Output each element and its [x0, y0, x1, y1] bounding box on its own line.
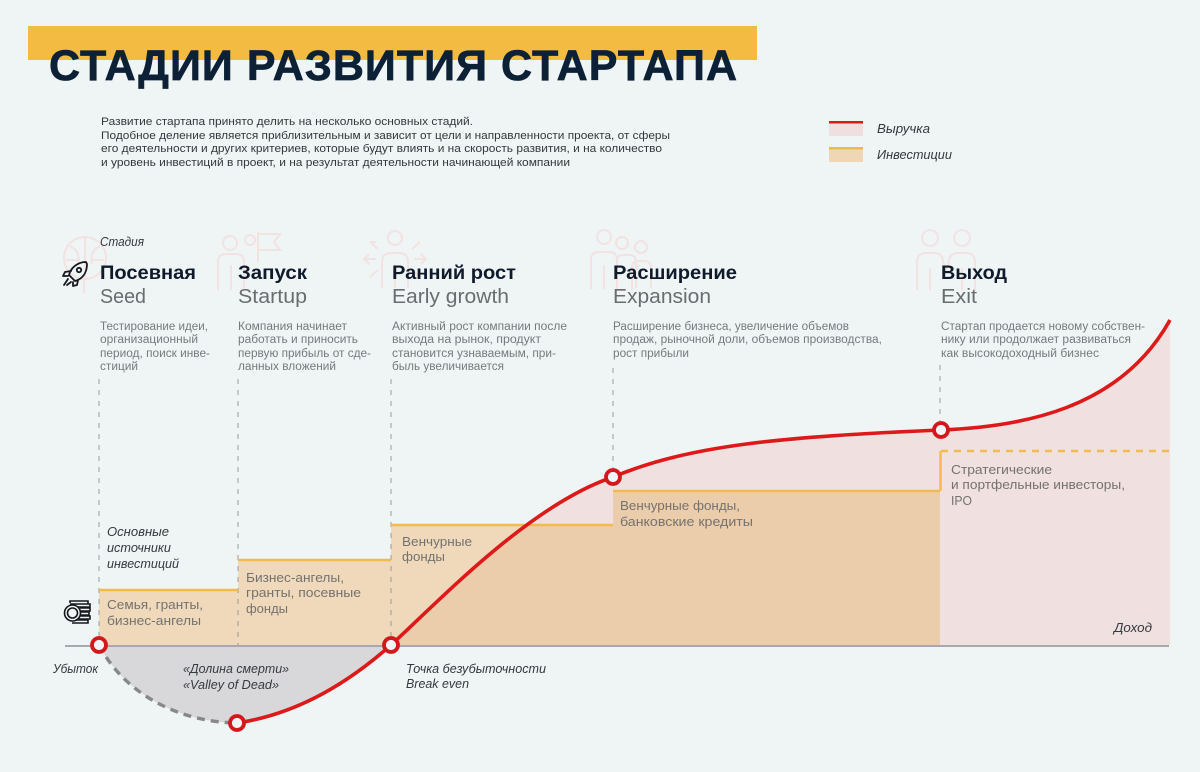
- column: seed: [100, 263, 210, 373]
- exit description: нику или продолжает развиваться: [941, 334, 1131, 346]
- faded icon: expansion team: [591, 230, 651, 290]
- sources: exit: Стратегические: [951, 462, 1052, 477]
- dashed loss curve: [99, 645, 237, 723]
- investment sources label: Основные: [107, 525, 169, 539]
- investment sources label: инвестиций: [107, 557, 179, 571]
- sources: exit: [951, 462, 1125, 508]
- intro text: и уровень инвестиций в проект, и на результат деятельности начинающей компании: [101, 157, 570, 169]
- early growth description: выхода на рынок, продукт: [392, 334, 542, 346]
- startup description: работать и приносить: [238, 334, 358, 346]
- legend: investment swatch: [829, 147, 863, 162]
- seed description: период, поиск инве-: [100, 348, 210, 360]
- exit subheading: Exit: [941, 286, 977, 308]
- sources: expansion: [620, 498, 753, 529]
- sources: early growth: фонды: [402, 549, 445, 564]
- sources: early growth: [402, 534, 472, 564]
- intro text: Развитие стартапа принято делить на несколько основных стадий.: [101, 116, 473, 128]
- seed description: организационный: [100, 334, 198, 346]
- stage guide lines: [99, 365, 940, 645]
- sources: seed: Семья, гранты,: [107, 597, 203, 612]
- faded icon: exit handshake: [917, 230, 975, 290]
- legend: [829, 121, 952, 162]
- label: income: Доход: [1112, 621, 1152, 635]
- investment sources label: [107, 525, 179, 571]
- exit heading: Выход: [941, 263, 1007, 284]
- column: startup: [238, 263, 371, 373]
- sources: exit: IPO: [951, 493, 972, 508]
- sources: startup: гранты, посевные: [246, 585, 361, 600]
- startup subheading: Startup: [238, 286, 307, 308]
- column: early growth: [392, 263, 567, 373]
- area: revenue: [391, 320, 1170, 645]
- column: exit: [941, 263, 1145, 360]
- faded icon: seed idea: [64, 237, 106, 293]
- sources: seed: бизнес-ангелы: [107, 613, 201, 628]
- seed description: [100, 321, 210, 373]
- early growth description: Активный рост компании после: [392, 321, 567, 333]
- label: stage: Стадия: [100, 235, 144, 249]
- label: break even: [406, 662, 546, 691]
- sources: startup: фонды: [246, 601, 288, 616]
- sources: startup: Бизнес-ангелы,: [246, 570, 344, 585]
- intro text: [101, 116, 670, 169]
- axis: [65, 645, 1169, 647]
- expansion subheading: Expansion: [613, 286, 711, 308]
- seed heading: Посевная: [100, 263, 196, 284]
- startup description: Компания начинает: [238, 321, 348, 333]
- legend: investment label: Инвестиции: [877, 148, 952, 162]
- startup description: [238, 321, 371, 373]
- exit description: Стартап продается новому собствен-: [941, 321, 1145, 333]
- column: expansion: [613, 263, 882, 360]
- intro text: его деятельности и других критериев, которые будут влиять и на скорость развития, и на количество: [101, 143, 662, 155]
- label: valley of death: «Valley of Dead»: [183, 678, 279, 692]
- revenue curve: [237, 320, 1170, 723]
- expansion description: продаж, рыночной доли, объемов производства,: [613, 334, 882, 346]
- icon: rocket: [63, 262, 87, 286]
- label: loss: Убыток: [52, 662, 99, 676]
- seed subheading: Seed: [100, 286, 146, 308]
- seed description: стиций: [100, 361, 138, 373]
- sources: seed: [107, 597, 203, 628]
- title: СТАДИИ РАЗВИТИЯ СТАРТАПА: [49, 42, 737, 90]
- legend: revenue label: Выручка: [877, 122, 930, 136]
- investment sources label: источники: [107, 541, 171, 555]
- startup heading: Запуск: [238, 263, 308, 284]
- legend: revenue swatch: [829, 121, 863, 136]
- area: revenue and investment overlap: [398, 492, 940, 645]
- area: investment steps: [99, 491, 940, 645]
- faded icon: early growth person with arrows: [364, 231, 426, 288]
- early growth description: становится узнаваемым, при-: [392, 348, 556, 360]
- startup description: ланных вложений: [238, 361, 336, 373]
- expansion description: Расширение бизнеса, увеличение объемов: [613, 321, 849, 333]
- early growth description: [392, 321, 567, 373]
- exit description: [941, 321, 1145, 360]
- sources: expansion: банковские кредиты: [620, 514, 753, 529]
- label: break even: Break even: [406, 677, 469, 691]
- sources: exit: и портфельные инвесторы,: [951, 477, 1125, 492]
- exit description: как высокодоходный бизнес: [941, 348, 1099, 360]
- expansion description: рост прибыли: [613, 348, 689, 360]
- intro text: Подобное деление является приблизительным и зависит от цели и направленности проекта, от сферы: [101, 130, 670, 142]
- expansion description: [613, 321, 882, 360]
- startup description: первую прибыль от сде-: [238, 348, 371, 360]
- early growth heading: Ранний рост: [392, 263, 516, 284]
- chart: investment and revenue curve: [65, 320, 1170, 730]
- title banner: [28, 26, 757, 60]
- sources: expansion: Венчурные фонды,: [620, 498, 740, 513]
- expansion heading: Расширение: [613, 263, 737, 284]
- early growth subheading: Early growth: [392, 286, 509, 308]
- icon: coins: [64, 601, 90, 623]
- label: break even: Точка безубыточности: [406, 662, 546, 676]
- milestone markers: [92, 423, 948, 730]
- investment step line: [99, 451, 1170, 590]
- label: valley of death: [183, 662, 289, 692]
- seed description: Тестирование идеи,: [100, 321, 208, 333]
- area: valley of death: [99, 645, 391, 723]
- faded icon: startup person and flag: [218, 232, 280, 290]
- label: valley of death: «Долина смерти»: [183, 662, 289, 676]
- sources: early growth: Венчурные: [402, 534, 472, 549]
- sources: startup: [246, 570, 361, 616]
- early growth description: быль увеличивается: [392, 361, 504, 373]
